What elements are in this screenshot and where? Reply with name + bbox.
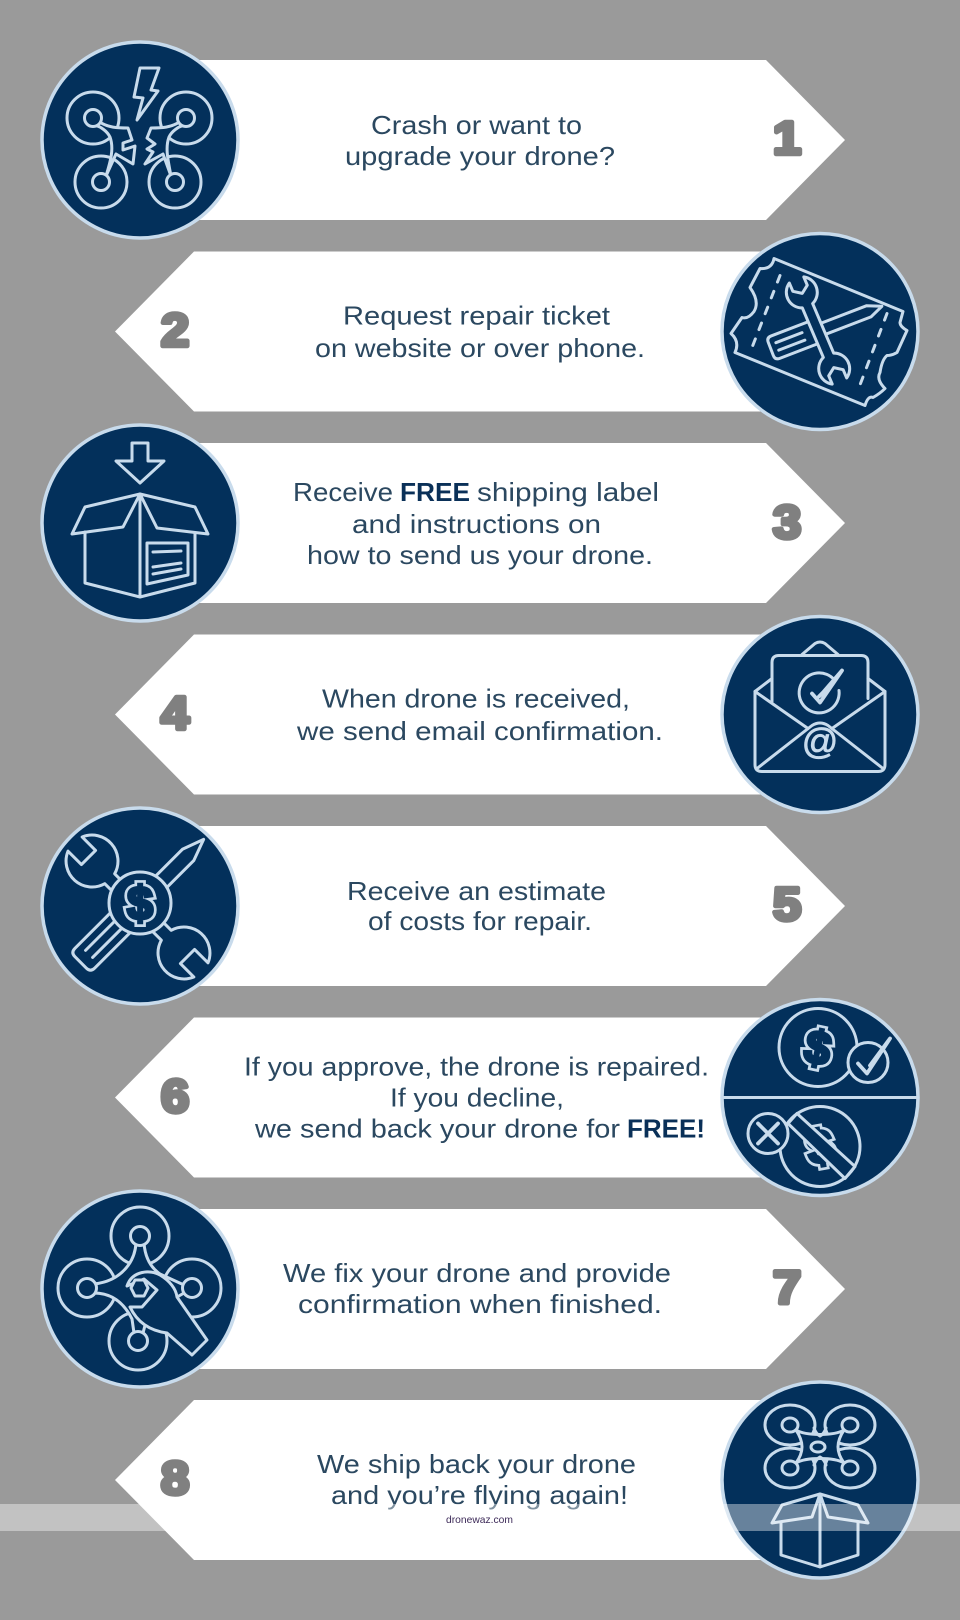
text: step 3: FREE (400, 477, 470, 507)
icon part: dollar sign: $ (127, 877, 153, 929)
icon part: declined coin (748, 1106, 860, 1186)
icon part: approved dollar: $ (800, 1019, 836, 1076)
step 4 (115, 616, 918, 812)
text: step 1: upgrade your drone? (345, 141, 615, 171)
text: step 6: If you approve, the drone is repaired. (244, 1052, 709, 1082)
text: step 6: FREE! (627, 1114, 705, 1144)
panel: step 5 arrow (190, 826, 845, 986)
text: step 3 (293, 477, 659, 570)
text: step 7: confirmation when finished. (298, 1289, 662, 1319)
icon: approve or decline dollar (722, 1000, 918, 1196)
panel: step 8 arrow (115, 1400, 770, 1560)
number 6: 6 (161, 1071, 189, 1122)
text: step 3: shipping label (477, 477, 659, 507)
text: step 7: We fix your drone and provide (283, 1258, 671, 1288)
panel: step 6 arrow (115, 1018, 770, 1178)
step 3 (42, 425, 845, 621)
text: step 2: Request repair ticket (343, 300, 611, 330)
number 5: 5 (773, 879, 801, 930)
text: step 7 (283, 1258, 671, 1319)
icon part: check badge (848, 1038, 890, 1082)
text: step 1: Crash or want to (371, 110, 582, 140)
icon: box with down arrow (42, 425, 238, 621)
text: step 6: If you decline, (390, 1082, 564, 1112)
icon: crashed drone with lightning (42, 42, 238, 238)
text: step 2: on website or over phone. (315, 333, 645, 363)
icon part: declined dollar: $ (803, 1119, 837, 1174)
text: step 4: When drone is received, (322, 684, 630, 714)
icon: repair ticket (722, 234, 918, 430)
number 8: 8 (161, 1453, 189, 1504)
text: step 8 (317, 1449, 636, 1510)
text: step 1 (345, 110, 615, 171)
watermark: dronewaz.com (446, 1514, 513, 1526)
text: step 5: of costs for repair. (368, 906, 592, 936)
icon part: declined dollar: $ (803, 1119, 837, 1174)
panel: step 7 arrow (190, 1209, 845, 1369)
number 2: 2 (161, 305, 189, 356)
text: step 3: how to send us your drone. (307, 540, 653, 570)
step 7 (42, 1191, 845, 1387)
step 8 (115, 1382, 918, 1578)
step 5 (42, 808, 845, 1004)
step 1 (42, 42, 845, 238)
icon: envelope with check and at sign: @ (802, 720, 838, 762)
text: step 6 (244, 1052, 709, 1144)
icon part: dollar sign: $ (127, 877, 153, 929)
text: step 5: Receive an estimate (347, 876, 606, 906)
number 4: 4 (161, 688, 189, 739)
icon: drone above box (722, 1382, 918, 1578)
text: step 4: we send email confirmation. (296, 716, 663, 746)
step 2 (115, 234, 918, 430)
panel: step 1 arrow (190, 60, 845, 220)
icon part: approved dollar: $ (800, 1019, 836, 1076)
panel: step 3 arrow (190, 443, 845, 603)
icon part: strike band (788, 1114, 855, 1178)
text: step 6: we send back your drone for (254, 1114, 620, 1144)
step 6 (115, 1000, 918, 1196)
text: step 8: We ship back your drone (317, 1449, 636, 1479)
icon: drone with wrench (42, 1191, 238, 1387)
text: step 8: and you’re flying again! (331, 1480, 628, 1510)
icon: wrench, screwdriver and dollar (42, 808, 238, 1004)
text: step 3: Receive (293, 477, 393, 507)
text: step 2 (315, 300, 645, 363)
panel: step 4 arrow (115, 634, 770, 794)
number 1: 1 (773, 113, 801, 164)
light horizontal band (0, 1504, 960, 1531)
number 7: 7 (773, 1262, 801, 1313)
text: step 4 (296, 684, 663, 746)
panel: step 2 arrow (115, 252, 770, 412)
icon: envelope with check and at sign (722, 616, 918, 812)
text: step 5 (347, 876, 606, 936)
number 3: 3 (773, 497, 801, 548)
text: step 3: and instructions on (352, 509, 601, 539)
